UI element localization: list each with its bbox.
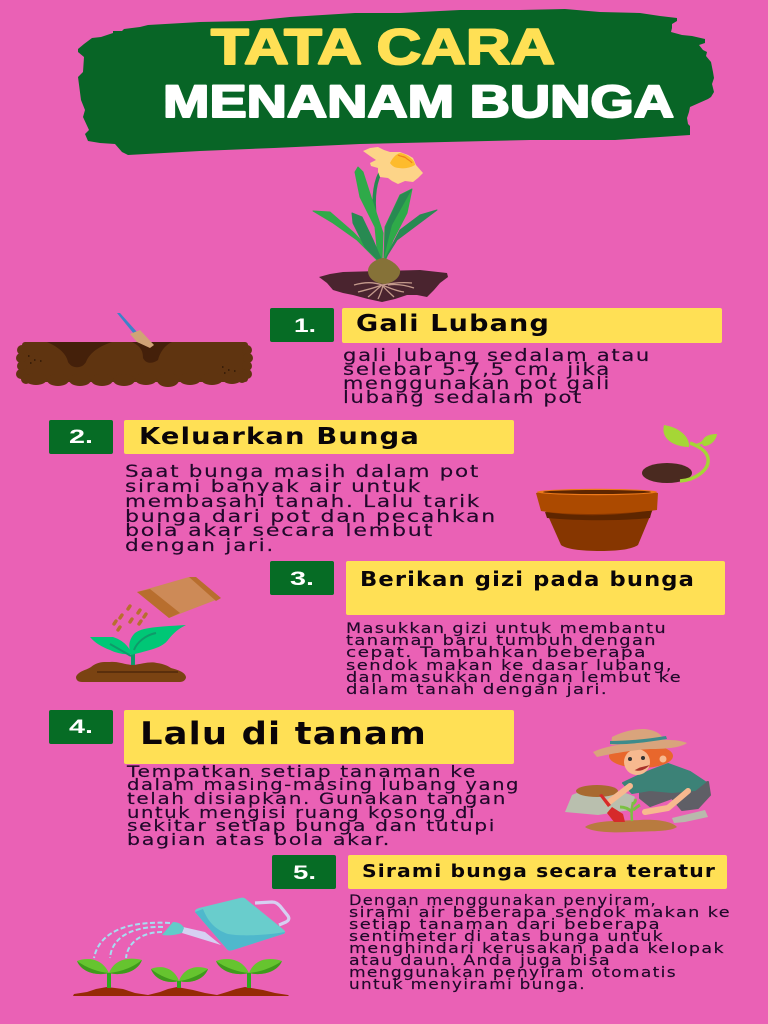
body text 3: dalam tanah dengan jari. xyxy=(346,682,608,698)
heading 2 xyxy=(124,420,514,454)
body text 4: telah disiapkan. Gunakan tangan xyxy=(127,789,507,808)
number badge 2: 2. xyxy=(69,427,93,448)
step 1 xyxy=(270,308,722,407)
body text 2: Saat bunga masih dalam pot xyxy=(125,462,480,481)
body text 5: menghindari kerusakan pada kelopak xyxy=(349,941,725,957)
body text 4: dalam masing-masing lubang yang xyxy=(127,775,520,794)
number badge 5: 5. xyxy=(293,863,316,884)
body text 2: dengan jari. xyxy=(125,536,275,555)
number badge 3 xyxy=(270,561,334,595)
body text 2: bunga dari pot dan pecahkan xyxy=(125,507,497,526)
body text 5: sentimeter di atas bunga untuk xyxy=(349,929,664,945)
body text 2 xyxy=(125,462,497,555)
title banner xyxy=(78,9,714,155)
heading 1: Gali Lubang xyxy=(356,311,550,337)
body text 2: bola akar secara lembut xyxy=(125,521,434,540)
body text 3: Masukkan gizi untuk membantu xyxy=(346,621,667,637)
number badge 2 xyxy=(49,420,113,454)
body text 5: menggunakan penyiram otomatis xyxy=(349,965,677,981)
body text 3: tanaman baru tumbuh dengan xyxy=(346,633,657,649)
body text 3: sendok makan ke dasar lubang, xyxy=(346,658,673,674)
number badge 1: 1. xyxy=(294,316,316,337)
number badge 5 xyxy=(272,855,336,889)
body text 4: untuk mengisi ruang kosong di xyxy=(127,803,476,822)
illustration: watering can over seedlings xyxy=(73,898,289,996)
step 5 xyxy=(272,855,731,993)
body text 5: Dengan menggunakan penyiram, xyxy=(349,893,657,909)
body text 1: gali lubang sedalam atau xyxy=(343,346,651,365)
number badge 3: 3. xyxy=(290,569,314,590)
body text 3: dan masukkan dengan lembut ke xyxy=(346,670,682,686)
body text 5: setiap tanaman dari beberapa xyxy=(349,917,661,933)
heading 5: Sirami bunga secara teratur xyxy=(362,861,716,882)
body text 3 xyxy=(346,621,682,698)
illustration: soil with holes and trowel xyxy=(16,313,253,387)
illustration: daffodil flower with bulb xyxy=(313,147,448,302)
body text 1 xyxy=(343,346,651,407)
body text 5: atau daun. Anda juga bisa xyxy=(349,953,611,969)
step 2 xyxy=(49,420,514,555)
heading 5 xyxy=(348,855,727,889)
number badge 4 xyxy=(49,710,113,744)
number badge 1 xyxy=(270,308,334,342)
heading 4 xyxy=(124,710,514,764)
step 3 xyxy=(270,561,725,698)
heading 4: Lalu di tanam xyxy=(140,716,427,752)
heading 3: Berikan gizi pada bunga xyxy=(360,567,695,591)
body text 4: Tempatkan setiap tanaman ke xyxy=(126,762,477,781)
heading 1 xyxy=(342,308,722,343)
heading 2: Keluarkan Bunga xyxy=(139,424,420,450)
step 4 xyxy=(49,710,520,849)
body text 5 xyxy=(349,893,731,993)
title line 2: MENANAM BUNGA xyxy=(163,76,674,127)
body text 5: sirami air beberapa sendok makan ke xyxy=(349,905,731,921)
body text 4 xyxy=(126,762,520,849)
body text 2: sirami banyak air untuk xyxy=(125,477,422,496)
title line 1: TATA CARA xyxy=(211,19,555,75)
heading 3 xyxy=(346,561,725,615)
illustration: gardener boy planting xyxy=(565,729,710,832)
body text 2: membasahi tanah. Lalu tarik xyxy=(125,492,481,511)
body text 5: untuk menyirami bunga. xyxy=(349,977,586,993)
illustration: flower pot with seedling xyxy=(536,425,717,551)
number badge 4: 4. xyxy=(69,717,93,738)
body text 4: bagian atas bola akar. xyxy=(127,830,391,849)
body text 1: lubang sedalam pot xyxy=(343,388,583,407)
body text 1: selebar 5-7,5 cm, jika xyxy=(343,360,611,379)
body text 3: cepat. Tambahkan beberapa xyxy=(346,645,647,661)
body text 4: sekitar setiap bunga dan tutupi xyxy=(127,816,496,835)
body text 1: menggunakan pot gali xyxy=(343,374,611,393)
illustration: fertilizer bag and sprout xyxy=(76,577,221,682)
